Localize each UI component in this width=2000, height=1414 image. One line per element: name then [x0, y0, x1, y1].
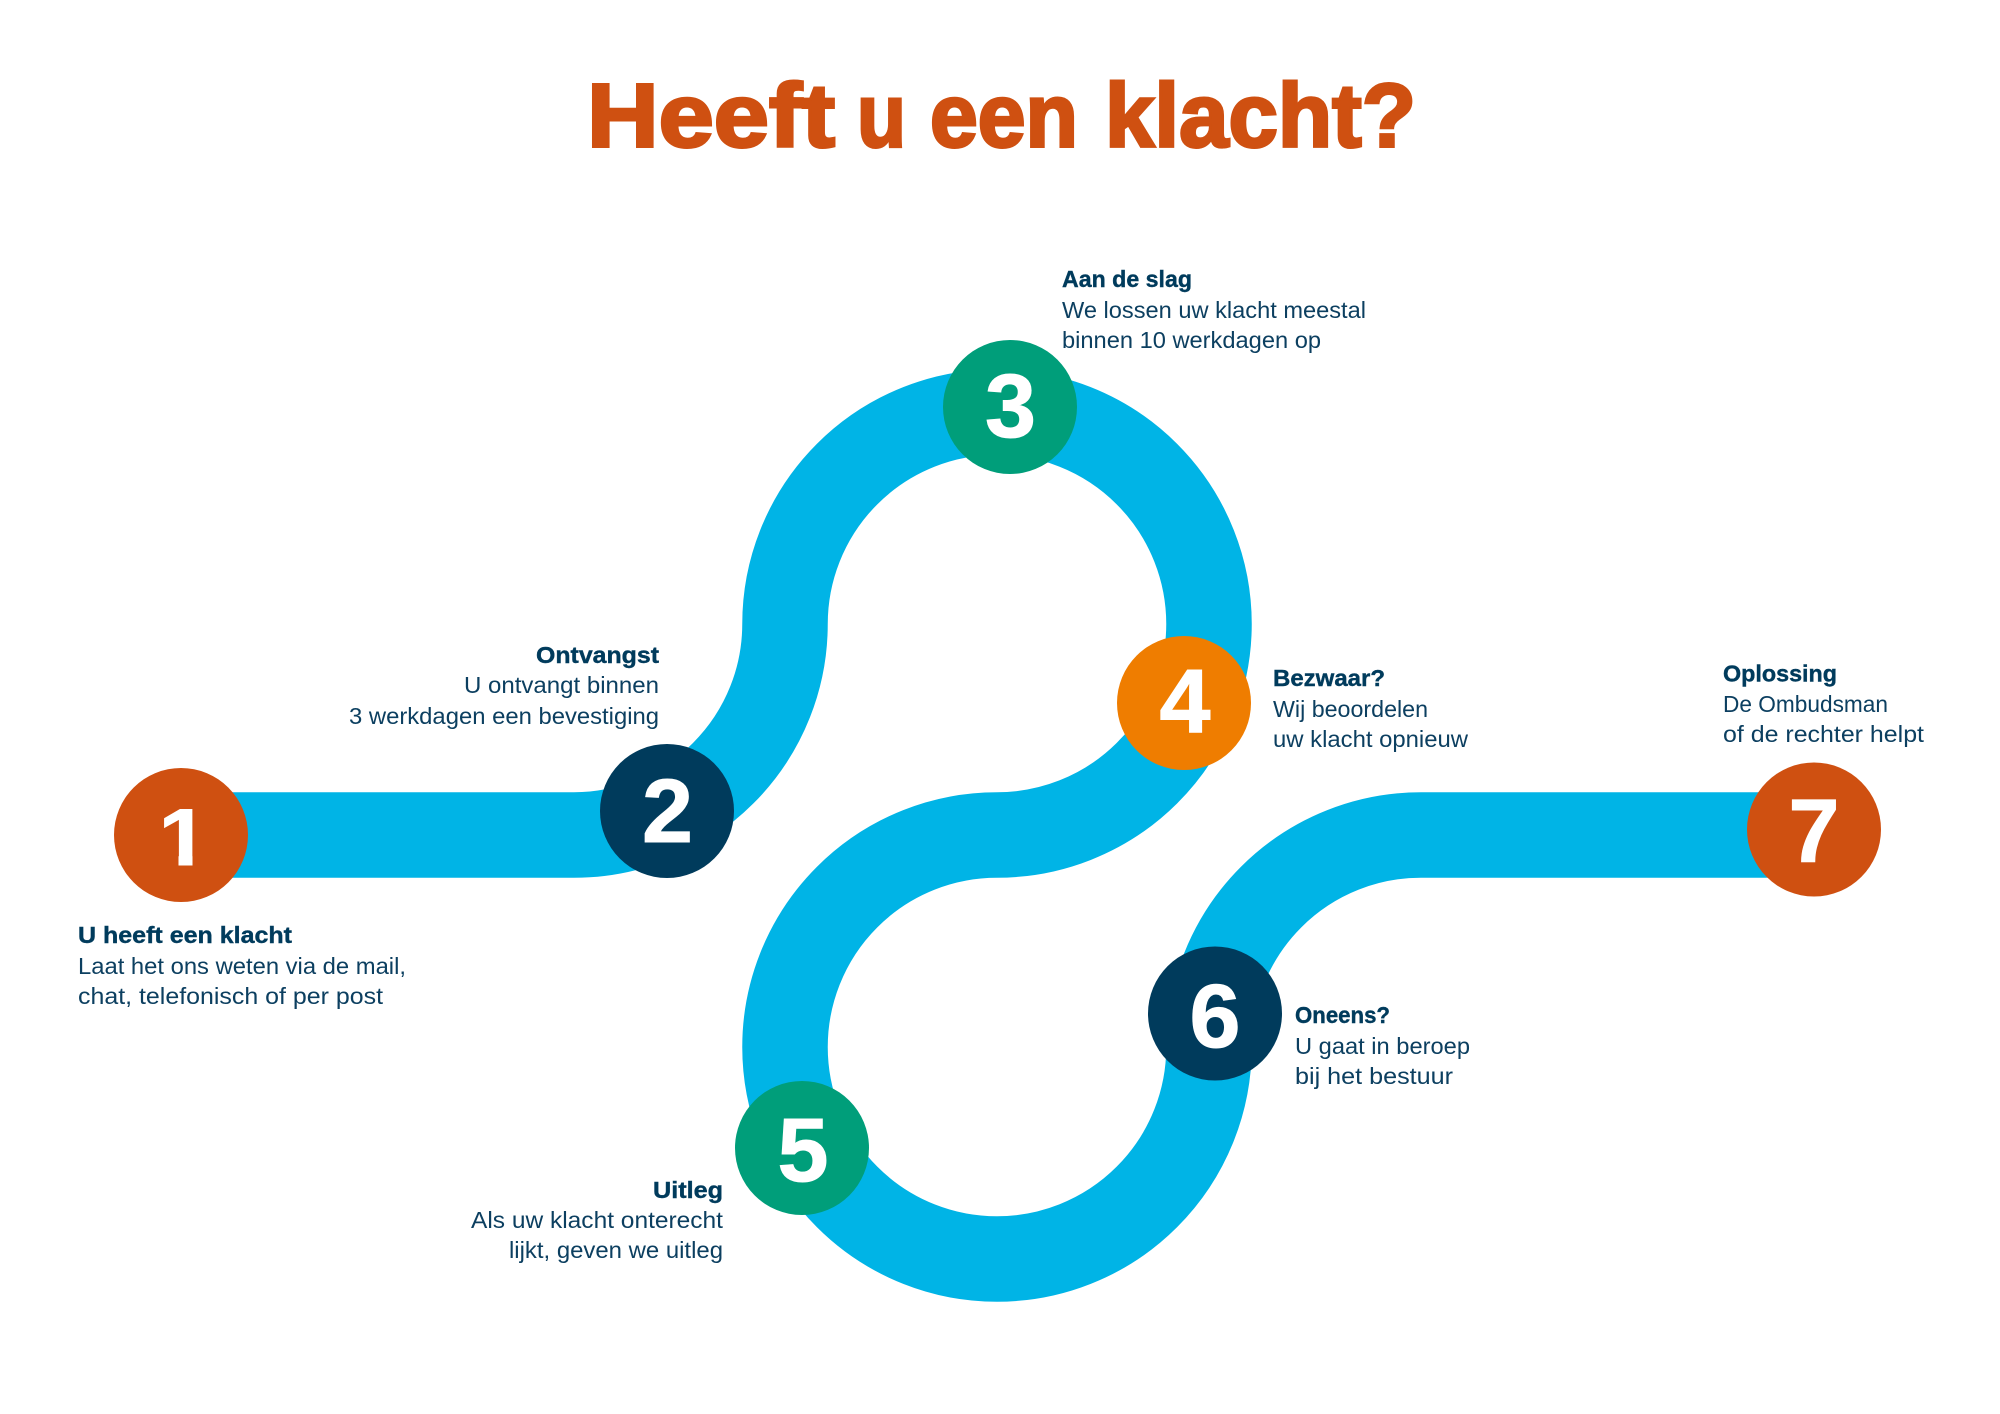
title: klacht? — [1105, 66, 1416, 166]
step 7 text: Oplossing — [1723, 660, 1837, 686]
step 3 text: binnen 10 werkdagen op — [1062, 327, 1321, 353]
step 7 text: of de rechter helpt — [1723, 721, 1925, 747]
step 6 text: U gaat in beroep — [1295, 1033, 1470, 1059]
step 2 text: Ontvangst — [536, 642, 659, 668]
step 3 marker — [943, 340, 1077, 474]
step 1 text — [78, 922, 406, 1009]
step 5 marker — [735, 1081, 869, 1215]
winding blue path — [180, 412, 1814, 1259]
step 4 text: uw klacht opnieuw — [1273, 726, 1468, 752]
title: Heeft — [587, 66, 835, 166]
step 1 marker — [114, 768, 248, 902]
step 4 text: Bezwaar? — [1273, 665, 1385, 691]
step 6 text — [1295, 1002, 1470, 1089]
step 2 text: U ontvangt binnen — [464, 672, 659, 698]
step 6 text: Oneens? — [1295, 1002, 1390, 1028]
step 5 text — [471, 1177, 724, 1263]
step 3 text: We lossen uw klacht meestal — [1062, 297, 1366, 323]
step 3 text — [1062, 266, 1366, 353]
step 2 text — [349, 642, 659, 729]
step 5 text: lijkt, geven we uitleg — [509, 1237, 723, 1263]
title: een — [930, 66, 1078, 166]
step 4 marker: 4 — [1160, 652, 1210, 752]
step 7 text — [1723, 660, 1925, 747]
step 1 text: Laat het ons weten via de mail, — [78, 953, 406, 979]
step 3 marker: 3 — [985, 357, 1036, 457]
step 1 marker: 1 — [158, 793, 208, 883]
step 6 marker: 6 — [1190, 967, 1240, 1067]
title — [587, 66, 1416, 166]
step 6 marker — [1148, 946, 1282, 1080]
step 7 marker: 7 — [1788, 782, 1840, 882]
step 2 marker — [600, 744, 734, 878]
step 3 text: Aan de slag — [1062, 266, 1192, 292]
step 1 text: U heeft een klacht — [78, 922, 292, 948]
step 5 text: Als uw klacht onterecht — [471, 1207, 724, 1233]
step 6 text: bij het bestuur — [1295, 1063, 1453, 1089]
step 2 text: 3 werkdagen een bevestiging — [349, 703, 659, 729]
title: u — [857, 66, 906, 166]
step 4 text — [1273, 665, 1468, 752]
step 4 marker — [1117, 636, 1251, 770]
step 5 text: Uitleg — [653, 1177, 723, 1203]
step 5 marker: 5 — [778, 1101, 828, 1201]
step 4 text: Wij beoordelen — [1273, 696, 1428, 722]
step 1 text: chat, telefonisch of per post — [78, 983, 384, 1009]
step 7 text: De Ombudsman — [1723, 691, 1888, 717]
step 7 marker — [1747, 762, 1881, 896]
step 2 marker: 2 — [642, 762, 693, 862]
